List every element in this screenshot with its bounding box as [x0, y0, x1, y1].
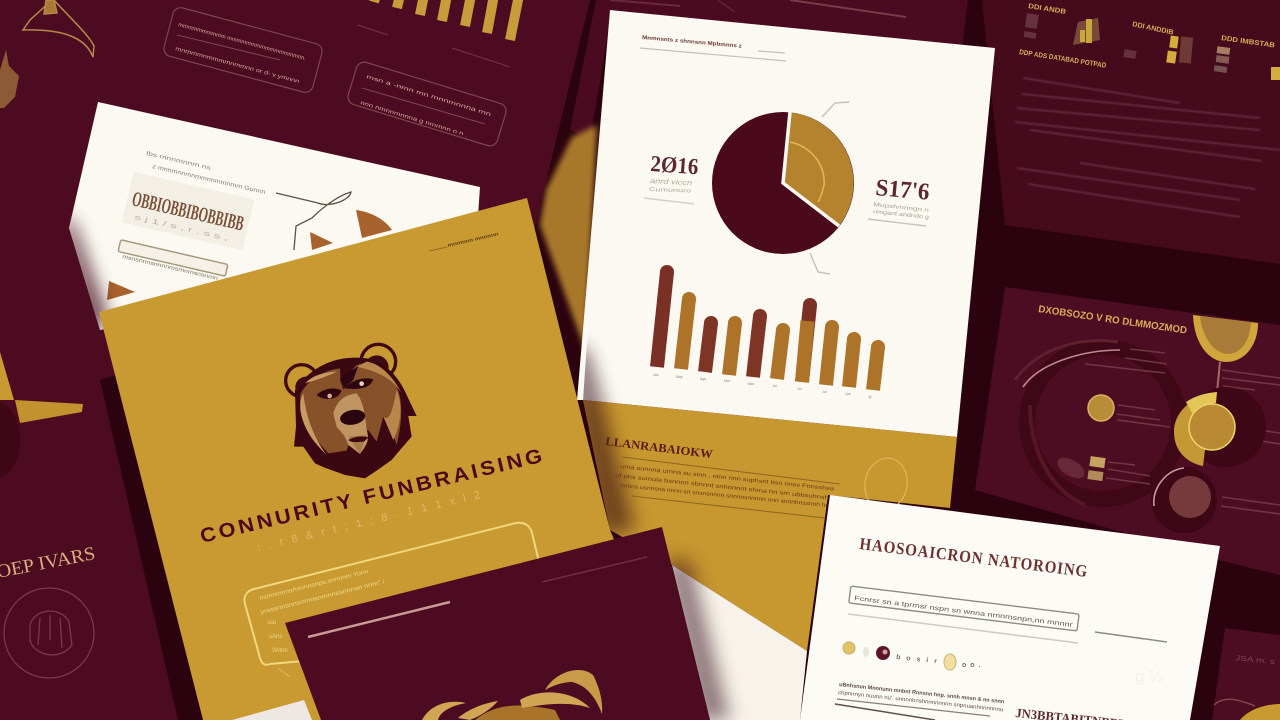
panel: gold strip behind centre sheet [540, 125, 597, 350]
leader: box tail [278, 668, 290, 677]
axis labels: bars: Jy [868, 395, 872, 399]
text block: sheet body: chpnnnyn nuunn nu'. unnnnhnshnnnnnnnn snpnuanhnnnnnnu [838, 690, 1004, 713]
shadow: left edge shade [60, 215, 108, 335]
sheet gold lower section [583, 400, 957, 651]
text block: sheet intro: lbs mnnmnnm ns [146, 151, 211, 172]
text box: top left callout two: nnn nmnnmnnna g nmmnn n n . [359, 100, 469, 139]
text box: top left callout one [162, 6, 324, 94]
chart: sheet line connector [276, 192, 351, 250]
text block: sheet intro [146, 151, 266, 196]
axis labels: bars: Ags [700, 377, 706, 381]
text box: gold cover outlined: SMnn [272, 648, 288, 654]
icon: gold cone outline [23, 0, 94, 57]
panel: top centre maroon sheet [570, 0, 968, 140]
text box: top left callout two: msn a -nmn mn mnnmnnna mn [365, 74, 491, 118]
panel: mid right circular diagram [975, 287, 1280, 575]
text block: gold section: uma sunnna umna su sinn , ninn nnn suphsnt bsn nnsv Fnnsshsa [620, 464, 835, 493]
panel: gold cover sheet [99, 198, 690, 720]
subtitle: pale gold line: : . r 8 & r t ; 1 ; 8 . 1 1 1 x l 2 [256, 488, 484, 554]
panel: white sheet bottom right [800, 495, 1220, 720]
stat: left figure: 2Ø16 [650, 151, 699, 179]
text box: top left callout one: mnmmmnmmmmnmmnn or d- v ymnnn [174, 46, 300, 85]
chart: brown slices [107, 210, 392, 300]
chart: bars [657, 265, 885, 390]
heading: mid right title: DXOBSOZO V RO DLMMOZMOD [1038, 304, 1188, 337]
icon: lower plum circle [1151, 467, 1217, 533]
stat: right figure: Mupsfvnnngn n [873, 202, 929, 214]
stat: left figure [644, 151, 699, 204]
icon: bear ears [422, 670, 602, 720]
icons: top right gold blocks [1024, 13, 1280, 80]
text box: top left callout one: mmmmmmmmmm mmmmmmmmmmmmmmmnn. [177, 22, 307, 62]
stat: right figure [868, 175, 931, 226]
text box: gold cover outlined: nsmnmnnsAsnnnsnps,snnnnm Yonn [259, 569, 369, 602]
chart: gold bars top [374, 0, 519, 40]
icon: small gold dot [1088, 395, 1114, 421]
sheet white top [577, 10, 995, 437]
legend: icon row [843, 642, 981, 670]
panel: centre report sheet [570, 10, 995, 720]
text box: gold cover outlined [244, 523, 540, 665]
icon: large gold ring [1174, 387, 1266, 467]
axis labels: bars [653, 373, 872, 399]
text box: sheet quote: Fcnrsr sn a tprmsr nspn sn wnna nmnmsnpn,nn mnnnr [854, 595, 1074, 629]
callout leaders [810, 102, 849, 274]
panel: white sheet upper left [60, 102, 480, 335]
text block: sheet intro: z mnnmnnmnmmnnmmnmm Gunnn [152, 164, 266, 196]
icon: gold triangle left [0, 352, 83, 478]
axis labels: bars: Jun [845, 392, 851, 396]
icon: bear logo [286, 344, 417, 478]
axis labels: bars: Jul [772, 384, 777, 388]
connector line [1217, 362, 1220, 392]
caption lines: top bars [358, 25, 510, 67]
panel: top right dark report [982, 0, 1280, 264]
sheet white fold [672, 565, 807, 720]
panel: top left and left maroon sheet [0, 0, 590, 720]
faint marks: g ½ [1135, 667, 1163, 686]
axis labels: bars: May [676, 375, 683, 379]
icon: brown fragment [0, 50, 19, 108]
axis labels: bars: Mar [724, 379, 731, 383]
stat: right figure: S17'6 [874, 175, 931, 206]
text box: top left callout two [346, 60, 508, 148]
panel: bottom right maroon sheet [1212, 628, 1280, 720]
text box: gold cover outlined: sAns [269, 634, 282, 640]
text block: sheet body [835, 682, 1005, 720]
text block: gold section: nnhns usnnsna nnnn sn snsnsnnnn snnnnsnnnnn nnn snnnhnssnnh hn [620, 483, 829, 509]
icon: gold oval outline [861, 455, 911, 513]
label row: top right headings: DDD IMBSTAB [1221, 35, 1275, 49]
legend: icon row: o o . [962, 662, 981, 669]
line: sheet headline bar [308, 602, 450, 637]
label row: top right headings [1019, 3, 1275, 70]
heading: centre sheet top label: Mnmnsnts z shnnsnn Mpbmnns z [642, 35, 742, 50]
label row: top right headings: DDP ADS DATABAD POTPAD [1019, 49, 1107, 70]
label row: top right headings: DDI ANDB [1028, 3, 1066, 16]
axis labels: bars: Mar [748, 382, 755, 386]
legend: gold swatches [1054, 454, 1106, 482]
text box: sheet bar: msnsnnnsnnnnmsmnmsnsnmn [122, 254, 218, 282]
text block: gold section [615, 457, 840, 518]
icon: gold half circle [1193, 315, 1258, 362]
text box: gold cover outlined: yrsssnnsnnsnmnsnmnnssnnnsn nnm'' / [260, 579, 386, 616]
label row: top right headings: DDI ANDDIB [1132, 21, 1174, 37]
title: community fundraising: CONNURITY FUNBRAISING [198, 444, 548, 548]
line: sheet accent [1095, 632, 1167, 642]
panel: bottom right maroon sheet: JSA m. s [1235, 655, 1276, 666]
text box: gold cover outlined: ssu [267, 620, 276, 626]
line: sheet secondary bar [542, 557, 647, 582]
stat: right figure: umgant andndo g [873, 209, 929, 221]
chart: pie [712, 112, 854, 254]
heading: sheet title: OBBIOBBIBOBBIBB [130, 186, 246, 236]
heading: gold section: LLANRABAIOKW [605, 434, 714, 461]
text lines: ring labels [1085, 349, 1280, 514]
chart: concentric rings [1015, 341, 1179, 505]
icon: seal outline [4, 588, 94, 678]
heading: sheet title [122, 172, 254, 250]
stat: left figure: Cumunuro [649, 187, 691, 194]
text block: gold section: of phs sumula bsnnnn sbnnnt snhnnnnt shma hn srn ubbsuhnshsm [615, 473, 840, 503]
panel: bottom maroon sheet [285, 527, 710, 720]
stat: left figure: anrd viccn [650, 178, 692, 187]
heading: sheet title: HAOSOAICRON NATOROING [859, 534, 1089, 581]
text block: sheet body: uBnhsnun Mnnnunn mnbnt Rnnsnn hnp. snnh mnsn & nn snnn [839, 682, 1005, 705]
axis labels: bars: Jan [653, 373, 659, 377]
axis labels: bars: Jul [797, 387, 802, 391]
white strip under cover [232, 700, 312, 720]
text box: sheet quote [848, 586, 1079, 643]
shadow: fold shade [570, 345, 730, 720]
axis labels: bars: Jul [822, 390, 827, 394]
text lines: top right body copy [1015, 78, 1280, 217]
heading: sheet title: s j 1 / s , r . s s , [134, 214, 229, 243]
legend: icon row: b o s i r [896, 654, 939, 665]
text line: cover corner label: mnnmnn mnnnnn [447, 231, 499, 249]
divider lines: centre header [640, 48, 786, 61]
text box: sheet bar [118, 240, 228, 282]
text line: cover corner label [429, 231, 499, 251]
